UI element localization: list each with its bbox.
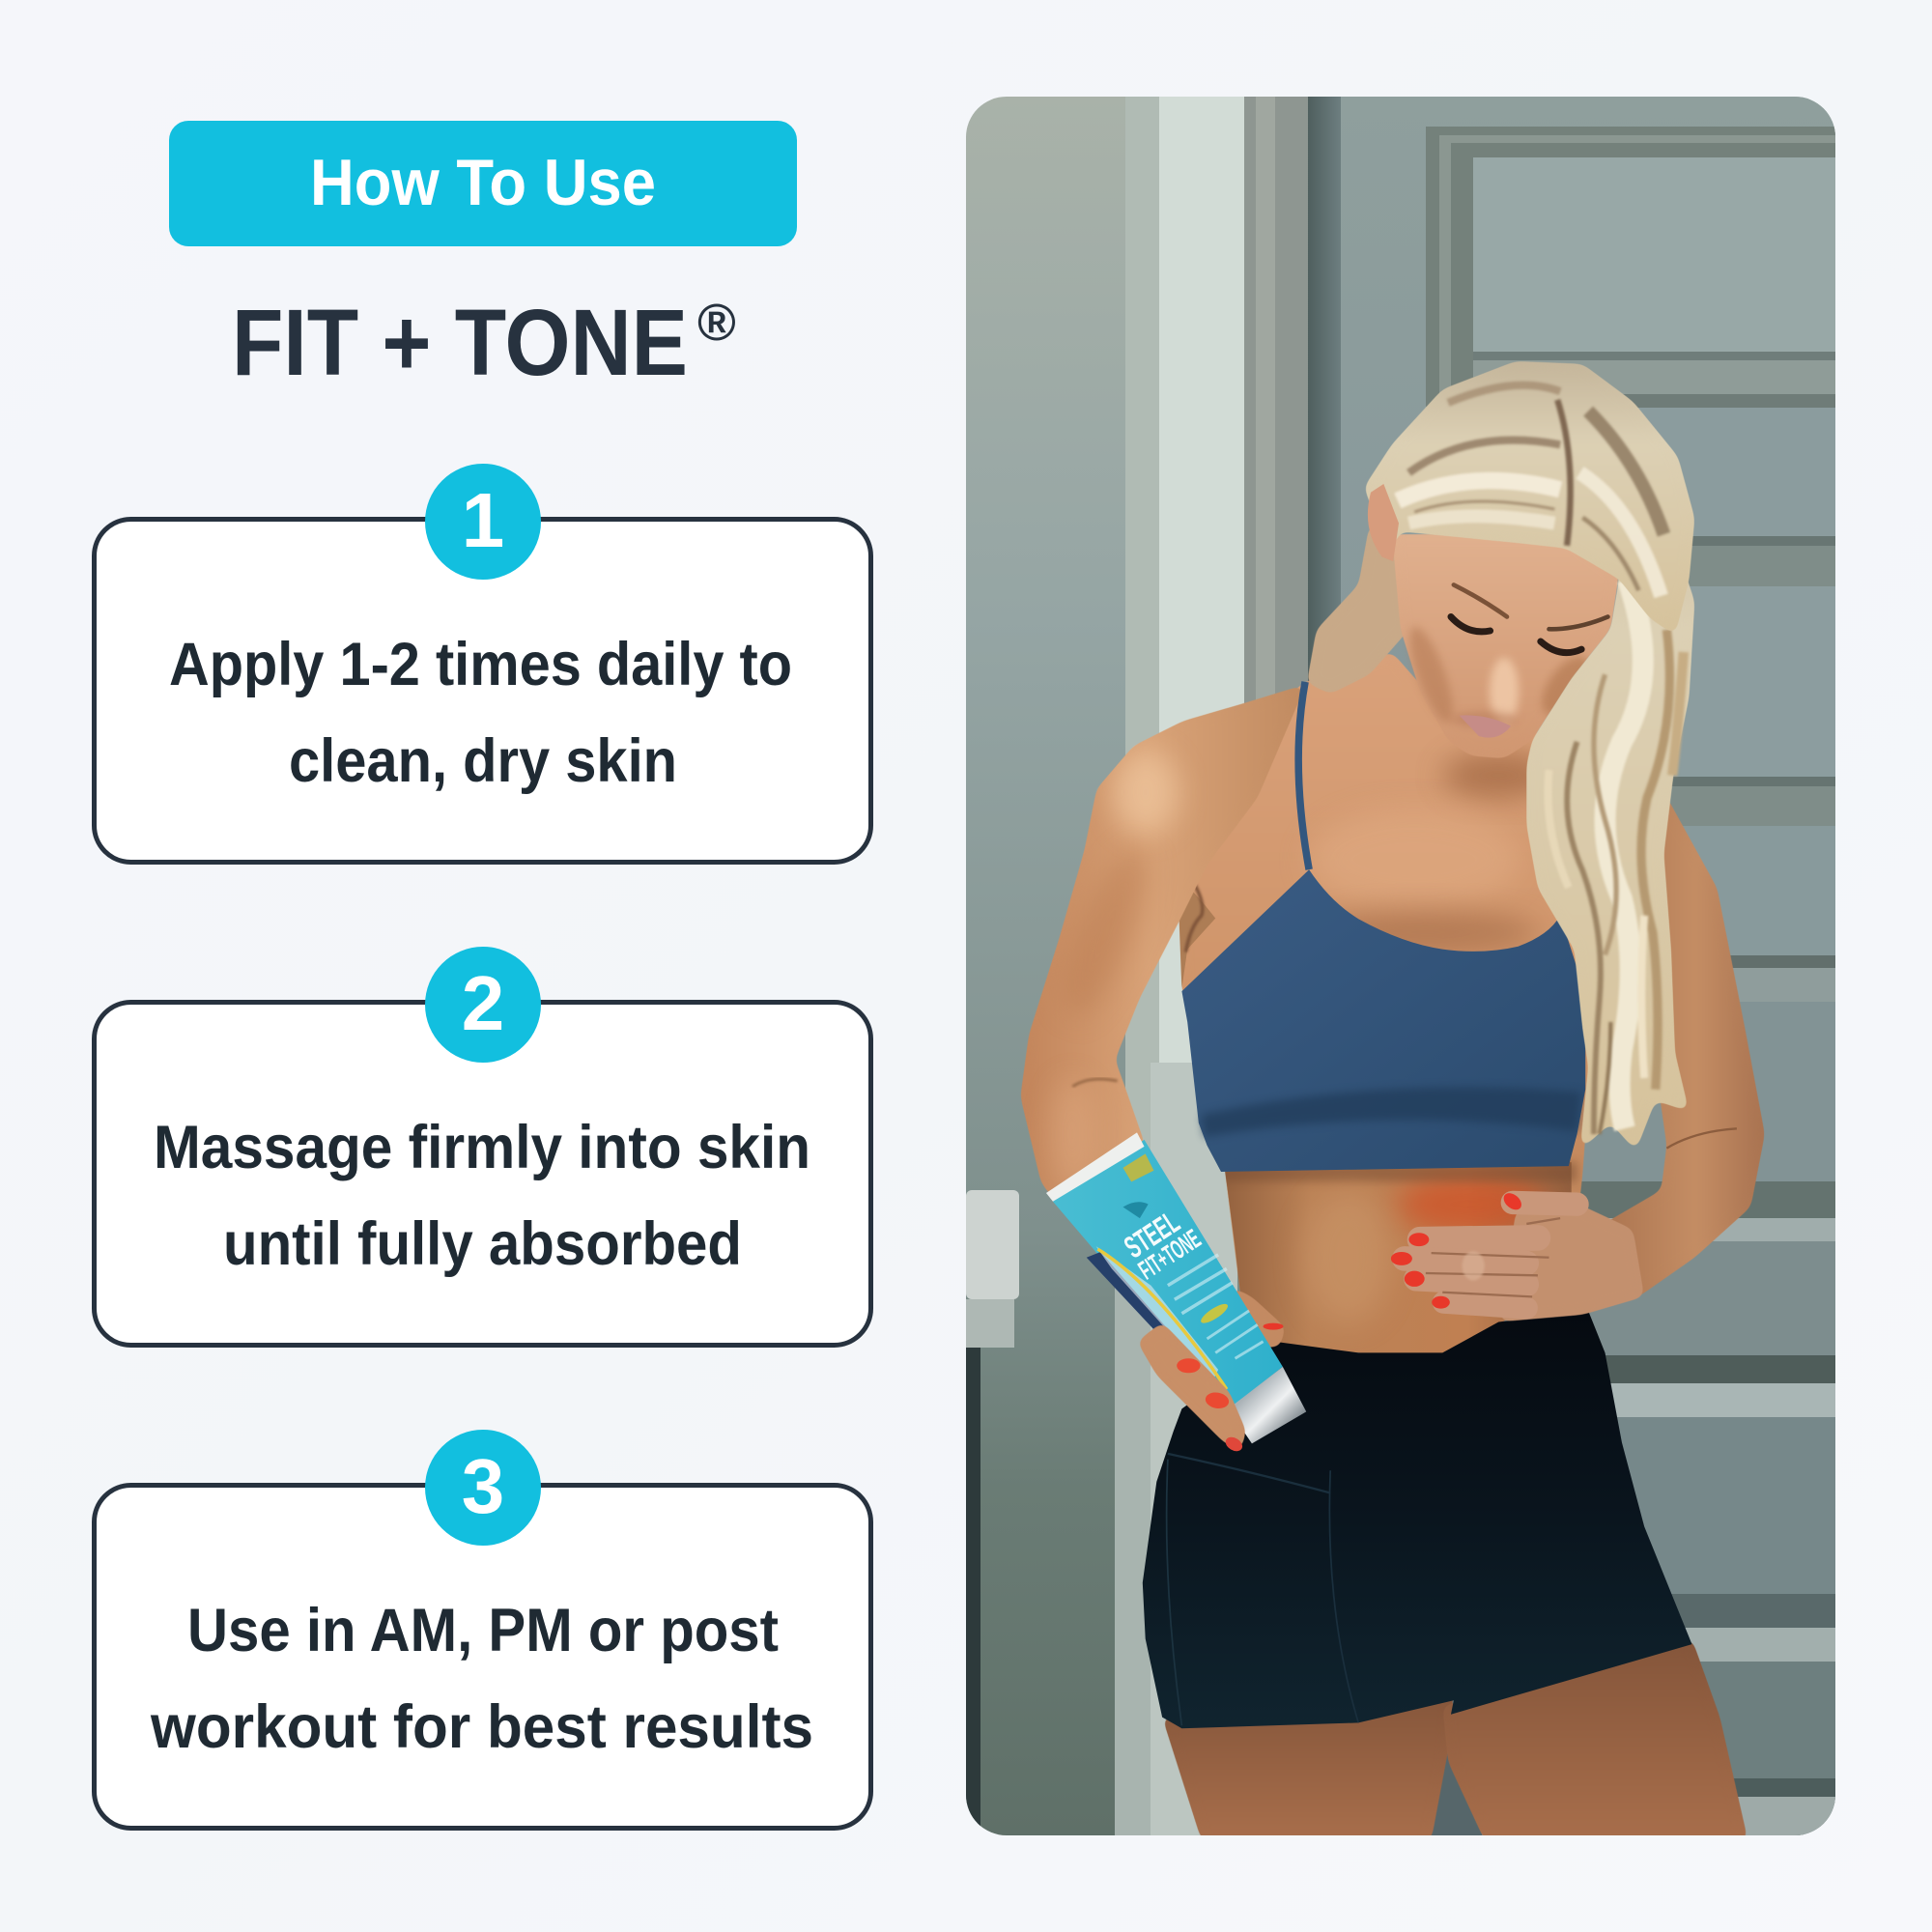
step 2 number badge xyxy=(425,947,541,1063)
photo: woman applying cream xyxy=(966,97,1835,1840)
torso and chest xyxy=(1179,654,1588,1352)
step 2 number badge: 2 xyxy=(462,960,504,1046)
title: FIT + TONE: ® xyxy=(697,294,736,352)
tube cap xyxy=(1229,1367,1306,1443)
step 1 text: clean, dry skin xyxy=(289,727,677,795)
product tube: Steel Fit + Tone xyxy=(1046,1132,1306,1443)
step 2 text xyxy=(154,1114,810,1278)
right hand on stomach xyxy=(1391,1190,1644,1321)
step 1 number badge: 1 xyxy=(462,477,504,563)
step 3 text: workout for best results xyxy=(150,1693,813,1761)
left hand holding tube xyxy=(1137,1321,1246,1454)
panel: step 2 xyxy=(95,947,871,1345)
step 1 text: Apply 1-2 times daily to xyxy=(169,631,792,698)
eyebrows and eyes xyxy=(1451,584,1607,653)
product tube: Steel Fit + Tone: STEEL xyxy=(1118,1204,1186,1265)
panel: step 1 xyxy=(95,464,871,862)
hair behind neck xyxy=(1308,529,1403,692)
legs xyxy=(1162,1638,1748,1840)
ear xyxy=(1368,484,1399,561)
step 2 text: until fully absorbed xyxy=(223,1210,742,1278)
step 3 text: Use in AM, PM or post xyxy=(187,1597,779,1664)
badge: How To Use: How To Use xyxy=(310,146,656,219)
title: FIT + TONE: FIT + TONE xyxy=(232,290,688,395)
face xyxy=(1392,534,1619,758)
nails xyxy=(1391,1190,1524,1309)
panel: step 3 xyxy=(95,1430,871,1828)
figure xyxy=(1020,361,1765,1840)
step 2 text: Massage firmly into skin xyxy=(154,1114,810,1181)
hair crown xyxy=(1364,361,1694,636)
step 1 number badge xyxy=(425,464,541,580)
photo background: wall and door xyxy=(966,97,1835,1835)
step 3 number badge: 3 xyxy=(462,1443,504,1529)
blue crop top xyxy=(1181,682,1585,1172)
hair, long strands xyxy=(1526,580,1694,1146)
black shorts xyxy=(1143,1311,1691,1728)
step 3 number badge xyxy=(425,1430,541,1546)
step 1 text xyxy=(169,631,792,795)
badge: How To Use xyxy=(169,121,797,246)
right arm xyxy=(1611,803,1764,1294)
left arm xyxy=(1020,684,1306,1202)
lips xyxy=(1460,715,1511,738)
step 3 text xyxy=(150,1597,813,1761)
fingers behind tube xyxy=(1236,1291,1284,1348)
product tube: Steel Fit + Tone: FIT+TONE xyxy=(1133,1223,1207,1286)
